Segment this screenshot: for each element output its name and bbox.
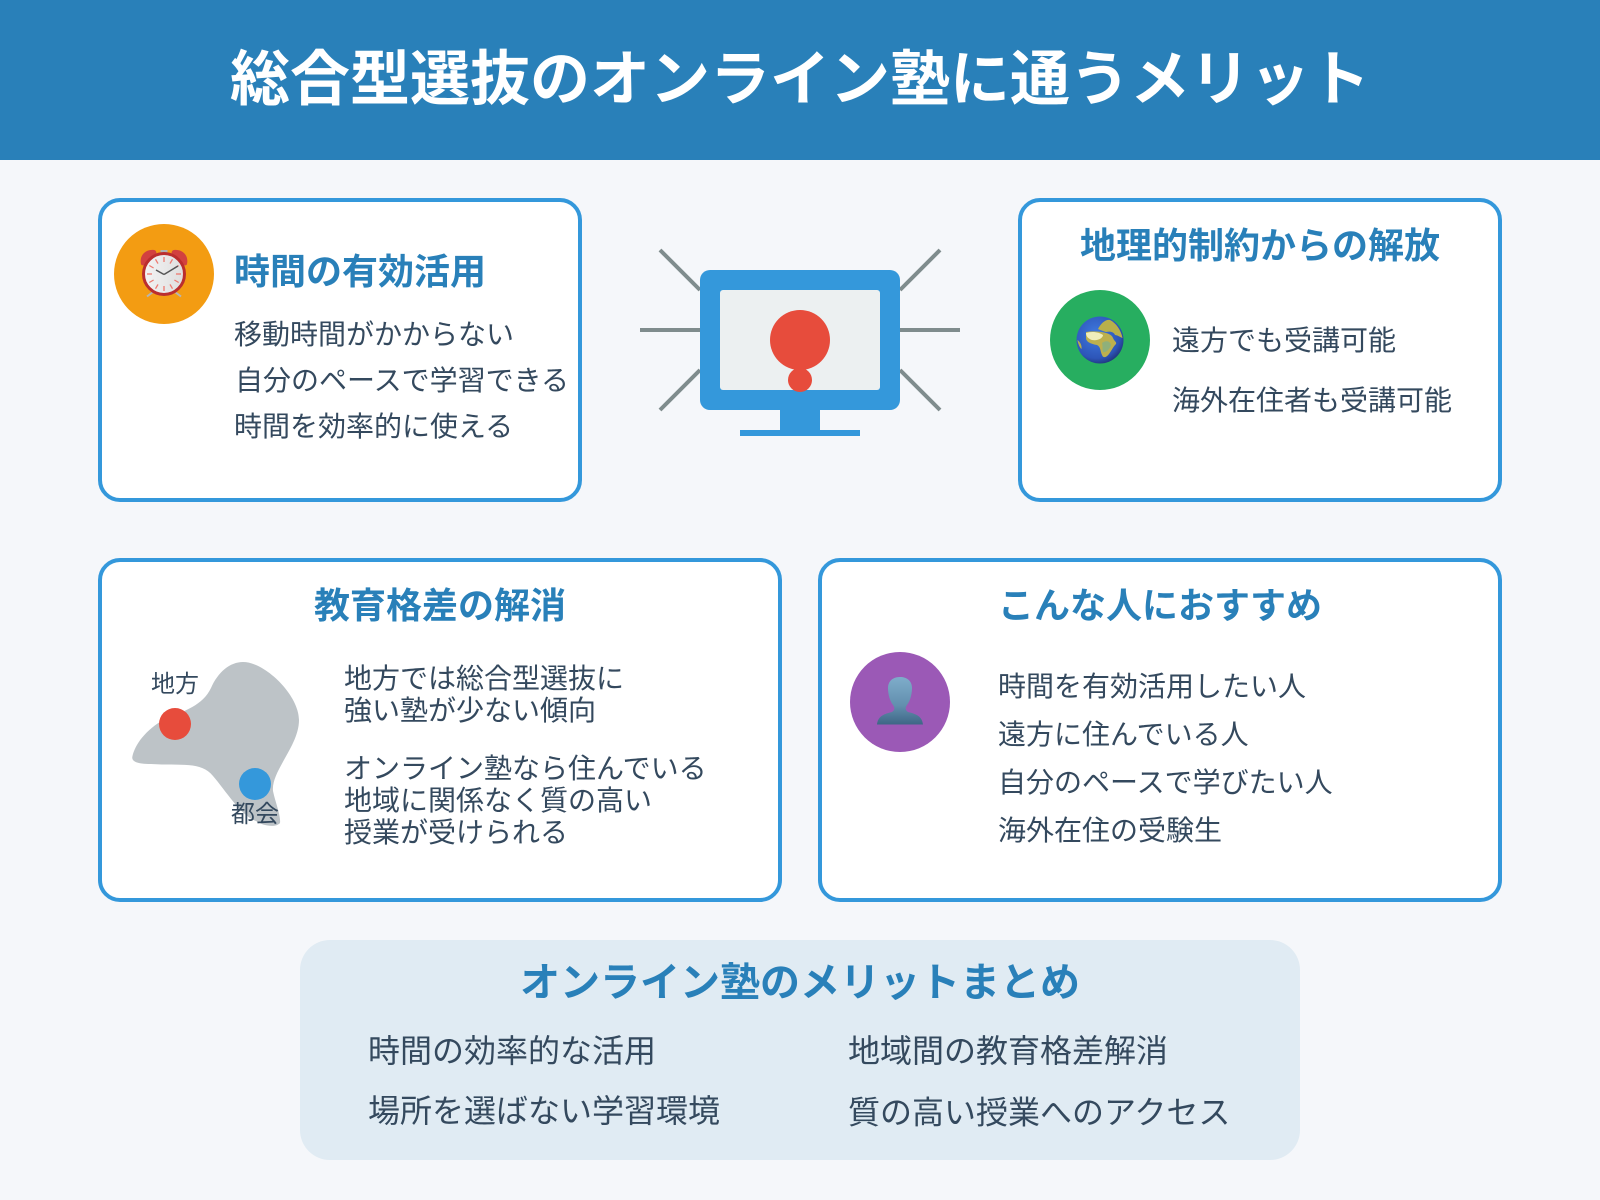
- text: education gap explanation: 地方では総合型選抜に: [344, 663, 624, 694]
- heading: summary: オンライン塾のメリットまとめ: [520, 961, 1080, 1005]
- text: recommended bullets: 遠方に住んでいる人: [998, 719, 1249, 750]
- text: summary right column: [848, 1033, 1230, 1130]
- text: recommended bullets: [998, 671, 1333, 846]
- panel: education gap: [100, 560, 780, 900]
- text: recommended bullets: 時間を有効活用したい人: [998, 671, 1306, 702]
- text: summary left column: [368, 1033, 720, 1129]
- chart: Japan map with regions: [132, 662, 299, 828]
- header band with title: [0, 0, 1600, 160]
- panel: time: [100, 200, 580, 500]
- text: time bullets: 自分のペースで学習できる: [235, 365, 569, 396]
- icon: alarm clock: [114, 224, 214, 324]
- text: education gap explanation: オンライン塾なら住んでいる: [344, 753, 707, 784]
- heading: recommended for: こんな人におすすめ: [998, 585, 1322, 626]
- icon: person: [850, 652, 950, 752]
- title: 総合型選抜のオンライン塾に通うメリット: [230, 46, 1370, 113]
- text: geography bullets: 海外在住者も受講可能: [1172, 385, 1452, 416]
- text: education gap explanation: [344, 663, 707, 848]
- panel: recommended for: [820, 560, 1500, 900]
- text: time bullets: 移動時間がかからない: [234, 319, 514, 350]
- illustration: online monitor: [640, 250, 960, 436]
- panel: summary: [300, 940, 1300, 1160]
- text: summary right column: 地域間の教育格差解消: [848, 1033, 1168, 1069]
- text: recommended bullets: 海外在住の受験生: [998, 815, 1222, 846]
- text: recommended bullets: 自分のペースで学びたい人: [998, 767, 1333, 798]
- text: geography bullets: 遠方でも受講可能: [1172, 325, 1396, 356]
- heading: education gap: 教育格差の解消: [314, 585, 566, 626]
- text: education gap explanation: 授業が受けられる: [344, 817, 568, 848]
- text: education gap explanation: 強い塾が少ない傾向: [344, 695, 596, 726]
- panel: geography: [1020, 200, 1500, 500]
- heading: time: 時間の有効活用: [234, 251, 486, 292]
- text: summary right column: 質の高い授業へのアクセス: [848, 1094, 1230, 1130]
- text: time bullets: 時間を効率的に使える: [234, 411, 513, 442]
- text: geography bullets: [1172, 325, 1452, 416]
- text: time bullets: [234, 319, 569, 442]
- text: summary left column: 場所を選ばない学習環境: [368, 1093, 720, 1129]
- heading: geography: 地理的制約からの解放: [1080, 225, 1440, 266]
- icon: globe: [1050, 290, 1150, 390]
- chart: Japan map with regions: 都会: [231, 801, 279, 828]
- text: summary left column: 時間の効率的な活用: [368, 1033, 656, 1069]
- text: education gap explanation: 地域に関係なく質の高い: [344, 785, 652, 816]
- chart: Japan map with regions: 地方: [151, 671, 199, 698]
